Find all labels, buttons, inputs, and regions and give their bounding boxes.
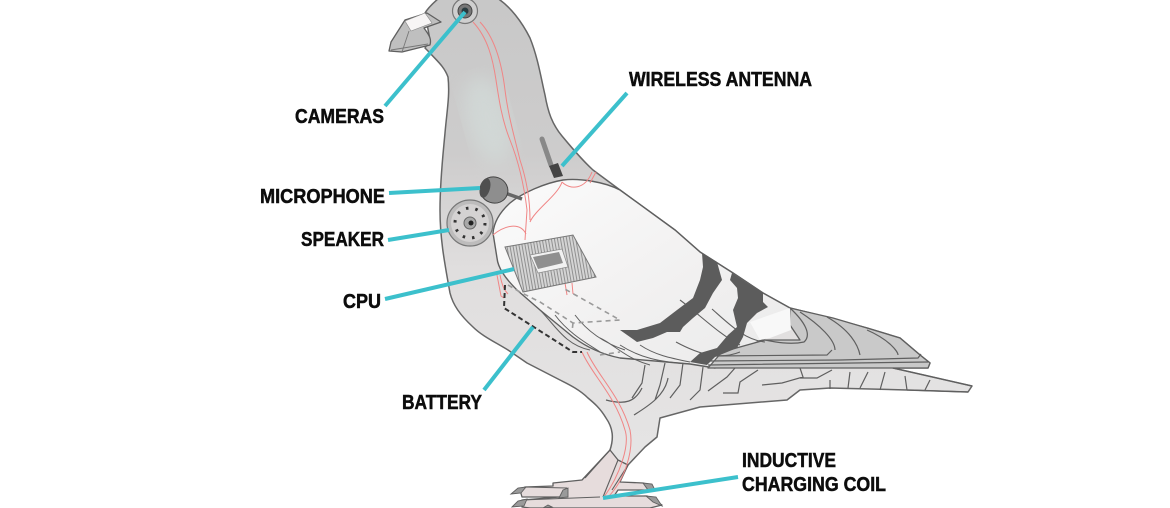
icon: cpu chip <box>505 235 596 292</box>
wing <box>493 179 790 368</box>
label: cpu: CPU <box>343 291 381 313</box>
leader line: cameras <box>385 12 465 106</box>
leader line: microphone <box>389 188 480 193</box>
under-tail and belly feathers <box>606 363 972 415</box>
label: cameras: CAMERAS <box>295 106 384 128</box>
icon: antenna <box>542 139 563 178</box>
neck iridescence <box>455 71 521 169</box>
leader line: speaker <box>388 230 449 240</box>
icon: speaker <box>447 200 493 246</box>
wing dark band 1 <box>620 253 722 342</box>
feet <box>511 450 662 508</box>
label: wireless antenna: WIRELESS ANTENNA <box>629 69 812 91</box>
wing covert lines <box>540 310 690 365</box>
leader line: battery <box>484 327 533 390</box>
icon: microphone <box>476 173 522 207</box>
label: inductive charging coil <box>742 450 886 496</box>
wing dark band 2 <box>690 273 768 365</box>
leader line: inductive charging coil <box>603 477 738 498</box>
label: speaker: SPEAKER <box>301 229 384 251</box>
pigeon <box>389 0 972 508</box>
leader line: wireless antenna <box>562 93 627 166</box>
beak <box>389 13 441 52</box>
label: battery: BATTERY <box>402 392 483 414</box>
body silhouette <box>425 0 972 483</box>
red wires <box>473 22 631 497</box>
leader line: cpu <box>385 269 514 299</box>
tail feathers <box>676 300 930 368</box>
label: inductive charging coil: CHARGING COIL <box>742 474 886 496</box>
battery dashed back <box>508 285 620 355</box>
battery outline <box>504 285 582 352</box>
label: microphone: MICROPHONE <box>260 186 385 208</box>
label: inductive charging coil: INDUCTIVE <box>742 450 836 472</box>
icon: camera eye <box>452 0 478 24</box>
